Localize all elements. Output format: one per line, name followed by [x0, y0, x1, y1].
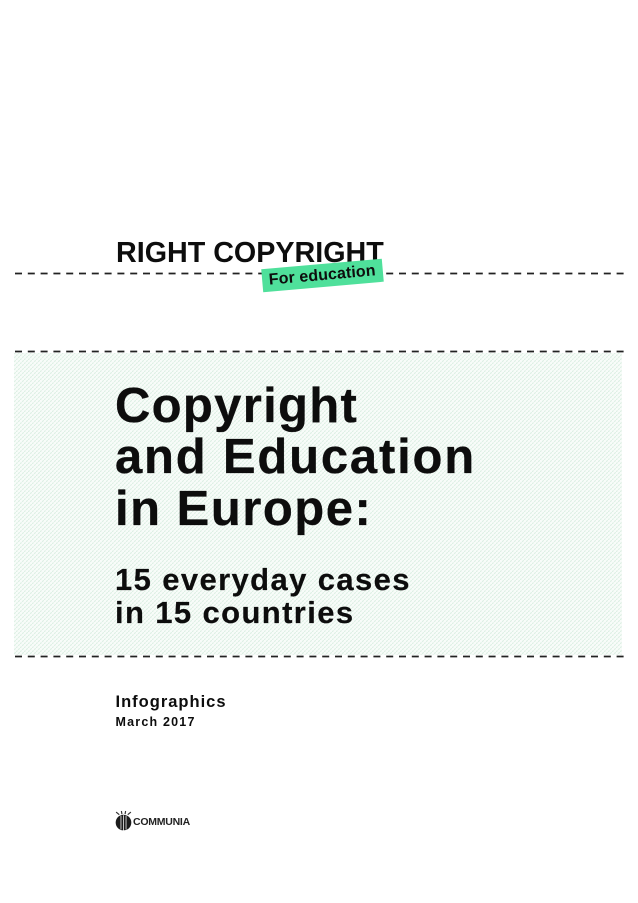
main heading: and Education: [115, 430, 476, 484]
logo wordmark: COMMUNIA: [133, 816, 190, 828]
logo: Communia: [116, 810, 190, 830]
subtitle: 15 everyday cases: [115, 562, 411, 597]
subtitle: in 15 countries: [115, 595, 354, 630]
main heading: Copyright: [115, 378, 358, 432]
subtitle: [115, 562, 411, 630]
main heading: [115, 378, 476, 536]
tag: for education: For education: [268, 262, 376, 288]
document type label: Infographics: [116, 693, 227, 711]
date: March 2017: [116, 714, 196, 728]
tag: for education: [261, 258, 383, 292]
main heading: in Europe:: [115, 482, 372, 536]
icon: communia emblem: [116, 810, 132, 830]
project title: RIGHT COPYRIGHT: [116, 237, 384, 269]
